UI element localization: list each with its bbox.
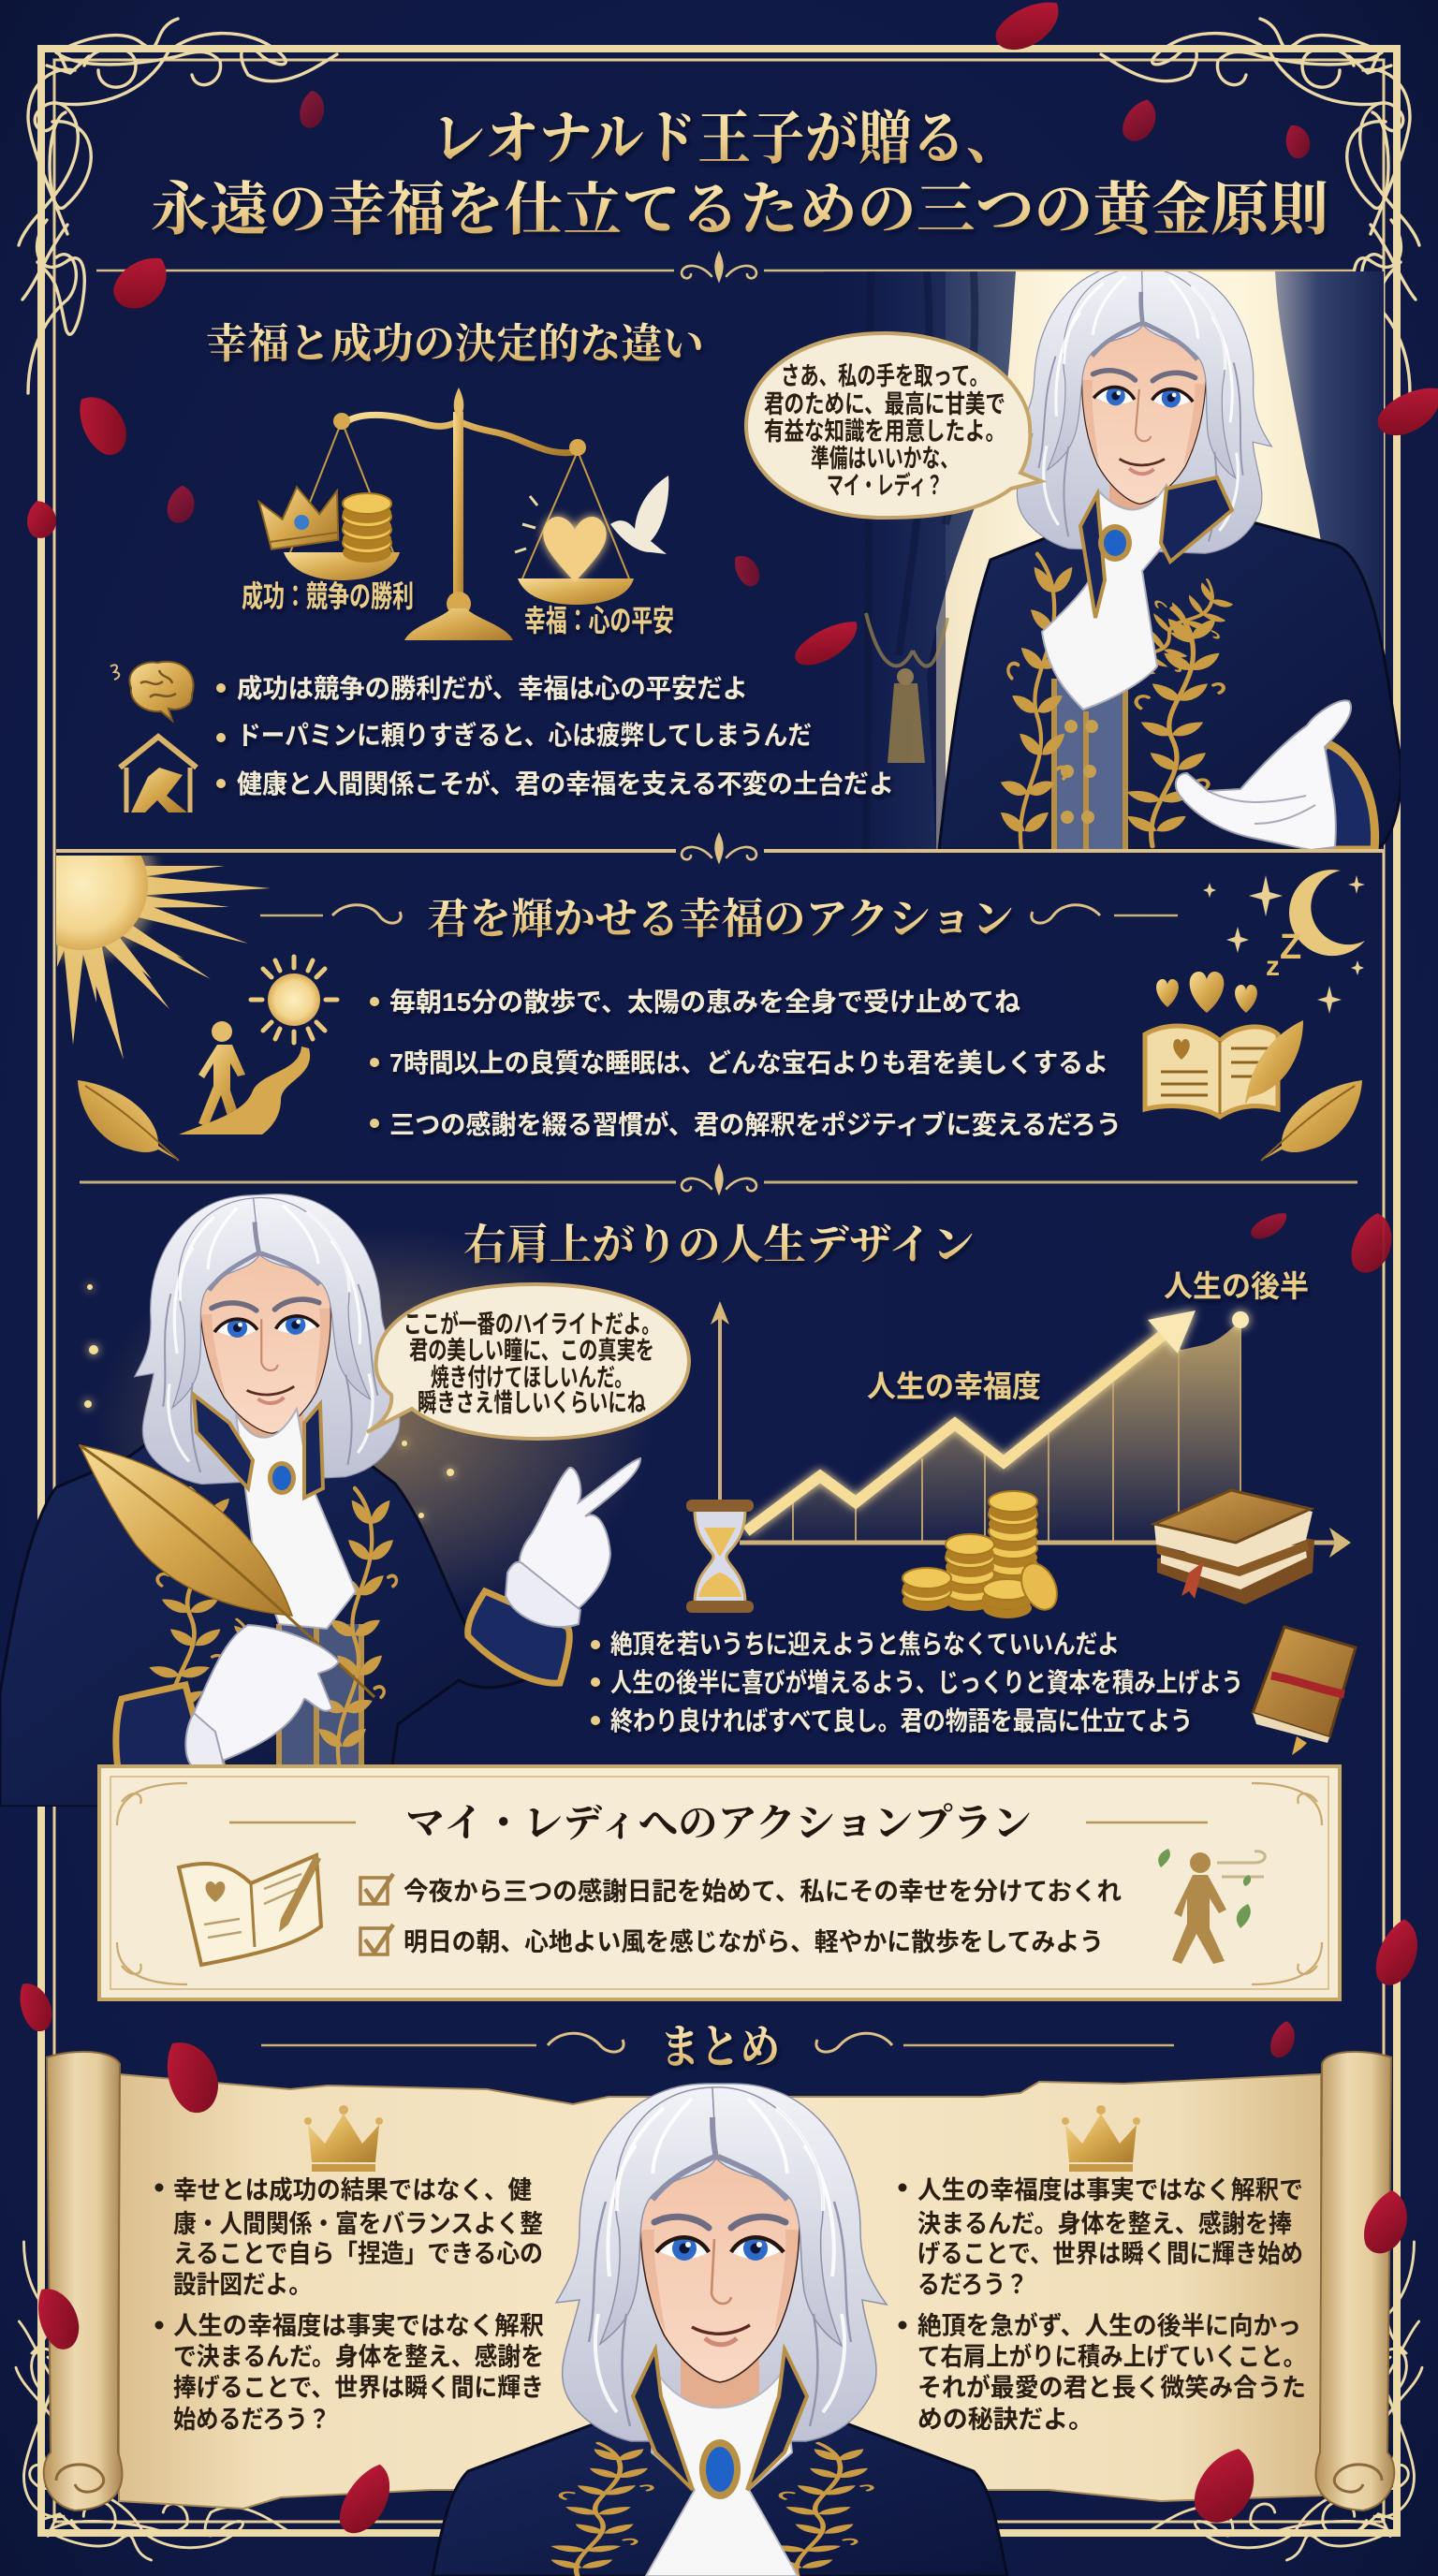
- collar: [633, 2349, 807, 2490]
- divider 3: [80, 1166, 1357, 1193]
- filigree: [547, 2443, 873, 2576]
- bullet list: section 3: [591, 1630, 1243, 1735]
- chart area fill: [746, 1320, 1240, 1543]
- coat: [433, 2415, 1007, 2576]
- icon: walker in wind: [1158, 1849, 1265, 1964]
- chart: life happiness curve: [711, 1301, 1351, 1558]
- feather quill: [80, 1445, 374, 1697]
- filigree: [146, 1488, 397, 1764]
- summary text left: [155, 2176, 544, 2434]
- speech bubble 1: [746, 333, 1041, 518]
- summary text right: 絶頂を急がず、人生の後半に向かっ: [917, 2311, 1301, 2340]
- axes: [711, 1301, 1351, 1558]
- glow behind prince: [94, 1226, 655, 1619]
- bullet list: section 2: [370, 988, 1122, 1139]
- title: [151, 108, 1328, 242]
- icon: left feather: [78, 1080, 179, 1161]
- speech bubble 2: [367, 1284, 689, 1439]
- pointing glove: [519, 1458, 640, 1621]
- bullet list: section 1: 成功は競争の勝利だが、幸福は心の平安だよ: [237, 673, 748, 703]
- label: success: 成功：競争の勝利: [242, 579, 414, 613]
- icon: house with clasped hands: [120, 737, 197, 812]
- icon: hourglass: [686, 1500, 754, 1613]
- summary text right: げることで、世界は瞬く間に輝き始め: [917, 2240, 1303, 2268]
- bullet list: section 1: 健康と人間関係こそが、君の幸福を支える不変の土台だよ: [237, 768, 894, 798]
- summary text right: 決まるんだ。身体を整え、感謝を捧: [917, 2210, 1292, 2238]
- brooch: [268, 1461, 296, 1495]
- speech bubble 1: 君のために、最高に甘美で: [764, 390, 1005, 418]
- collar: [194, 1395, 323, 1498]
- heading: マイ・レディへのアクションプラン: [405, 1803, 1032, 1846]
- speech bubble 2: ここが一番のハイライトだよ。: [404, 1310, 660, 1339]
- gloved open hand: [1176, 700, 1351, 850]
- summary text right: めの秘訣だよ。: [917, 2406, 1093, 2434]
- character: prince pointing with quill: [0, 1188, 640, 1807]
- panel: action plan: [99, 1766, 1340, 1999]
- summary text left: で決まるんだ。身体を整え、感謝を: [173, 2343, 544, 2371]
- summary text right: 人生の幸福度は事実ではなく解釈で: [917, 2176, 1303, 2204]
- filigree: [998, 554, 1242, 850]
- summary text right: [899, 2176, 1306, 2434]
- gold cuff: [1315, 743, 1375, 850]
- speech bubble 1: マイ・レディ？: [827, 471, 943, 500]
- icon: open journal with quill: [1145, 1020, 1303, 1117]
- bullet list: section 2: 7時間以上の良質な睡眠は、どんな宝石よりも君を美しくするよ: [389, 1048, 1108, 1077]
- cravat: [236, 1409, 356, 1629]
- bullet list: section 1: [216, 673, 894, 798]
- head: [556, 2084, 887, 2441]
- bullet list: section 3: 終わり良ければすべて良し。君の物語を最高に仕立てよう: [610, 1706, 1193, 1735]
- collar: [1080, 477, 1232, 618]
- sparkles: [84, 1284, 454, 1518]
- summary text right: るだろう？: [917, 2271, 1028, 2299]
- coat: [939, 510, 1401, 850]
- icon: ribboned book: [1253, 1627, 1356, 1755]
- rising line: [746, 1310, 1249, 1531]
- heading: section 1: 幸福と成功の決定的な違い: [206, 321, 704, 367]
- icon: walker on path: [179, 1021, 310, 1134]
- bullet list: section 2: 三つの感謝を綴る習慣が、君の解釈をポジティブに変えるだろう: [389, 1109, 1122, 1139]
- icon: stacked books: [1154, 1490, 1314, 1604]
- bullet list: section 3: 人生の後半に喜びが増えるよう、じっくりと資本を積み上げよう: [610, 1667, 1243, 1697]
- sun decoration: [56, 856, 270, 1060]
- panel: hero background with curtains: [824, 271, 1384, 850]
- title: 永遠の幸福を仕立てるための三つの黄金原則: [151, 178, 1328, 242]
- tassel: [866, 613, 947, 763]
- gold cuff right: [468, 1591, 569, 1683]
- summary text left: 設計図だよ。: [173, 2271, 312, 2299]
- speech bubble 1: 有益な知識を用意したよ。: [764, 417, 1005, 446]
- icon: moon and stars: [1203, 870, 1365, 1014]
- character: prince with open hand: [939, 260, 1401, 850]
- bullet list: section 2: 毎朝15分の散歩で、太陽の恵みを全身で受け止めてね: [389, 988, 1020, 1017]
- panel corners: [117, 1783, 1322, 1984]
- icon: balance scale: [257, 388, 668, 640]
- heading: section 3: 右肩上がりの人生デザイン: [463, 1222, 975, 1268]
- summary text left: えることで自ら「捏造」できる心の: [173, 2240, 543, 2268]
- summary text left: 捧げることで、世界は瞬く間に輝き: [173, 2374, 544, 2402]
- brooch: [1098, 524, 1132, 562]
- checklist: 今夜から三つの感謝日記を始めて、私にその幸せを分けておくれ: [404, 1878, 1122, 1906]
- heading: section 2: 君を輝かせる幸福のアクション: [427, 896, 1014, 943]
- icon: crown left: [304, 2105, 383, 2172]
- icon: hearts: [1156, 972, 1257, 1013]
- cravat: [646, 2371, 798, 2576]
- speech bubble 2: 焼き付けてほしいんだ。: [431, 1364, 633, 1392]
- gold cuff left: [112, 1681, 195, 1764]
- summary text left: 始めるだろう？: [173, 2406, 330, 2434]
- zzz: z: [1266, 951, 1280, 982]
- character: prince portrait: [433, 2084, 1007, 2576]
- divider 2: [56, 835, 1384, 861]
- right roll: [1316, 2052, 1394, 2510]
- speech bubble 1: 準備はいいかな、: [811, 445, 959, 473]
- summary text right: それが最愛の君と長く微笑み合うた: [917, 2373, 1306, 2402]
- icon: notebook: [179, 1855, 321, 1965]
- bullet list: section 1: ドーパミンに頼りすぎると、心は疲弊してしまうんだ: [237, 721, 812, 750]
- chart label: happiness: 人生の幸福度: [867, 1369, 1041, 1403]
- speech bubble 2: 君の美しい瞳に、この真実を: [409, 1337, 654, 1365]
- summary text left: 康・人間関係・富をバランスよく整: [173, 2210, 543, 2238]
- speech bubble 1: さあ、私の手を取って。: [781, 362, 989, 390]
- coat: [0, 1443, 527, 1807]
- heading: section 2: [260, 896, 1178, 943]
- speech bubble 2: 瞬きさえ惜しいくらいにね: [418, 1389, 646, 1417]
- icon: coins: [902, 1491, 1064, 1618]
- vest: [1054, 679, 1125, 850]
- label: happiness: 幸福：心の平安: [524, 604, 674, 637]
- checklist: 明日の朝、心地よい風を感じながら、軽やかに散歩をしてみよう: [404, 1927, 1104, 1956]
- icon: small sun: [251, 957, 337, 1043]
- chart label: second half: 人生の後半: [1164, 1269, 1309, 1303]
- icon: crown right: [1062, 2105, 1140, 2172]
- brooch: [699, 2439, 741, 2499]
- ruffle: [506, 1562, 580, 1627]
- head: [1010, 260, 1278, 556]
- icon: right feather: [1261, 1080, 1362, 1161]
- bullet list: section 3: 絶頂を若いうちに迎えようと焦らなくていいんだよ: [610, 1630, 1120, 1659]
- left roll: [44, 2052, 122, 2510]
- summary text left: 幸せとは成功の結果ではなく、健: [173, 2176, 532, 2204]
- panel: summary scroll: [44, 2052, 1394, 2510]
- head: [125, 1188, 411, 1487]
- title: レオナルド王子が贈る、: [432, 108, 1020, 171]
- summary text left: 人生の幸福度は事実ではなく解釈: [173, 2312, 544, 2340]
- summary text right: て右肩上がりに積み上げていくこと。: [917, 2342, 1306, 2371]
- heading: summary: [261, 2021, 1174, 2073]
- heading: summary: まとめ: [660, 2021, 780, 2073]
- parchment: [119, 2074, 1321, 2509]
- vest: [279, 1624, 361, 1774]
- divider top: [96, 254, 1353, 280]
- cravat: [1042, 485, 1181, 710]
- icon: brain: [110, 662, 194, 721]
- checklist: [360, 1874, 1122, 1956]
- zzz: Z: [1280, 928, 1301, 967]
- lower glove: [194, 1625, 339, 1761]
